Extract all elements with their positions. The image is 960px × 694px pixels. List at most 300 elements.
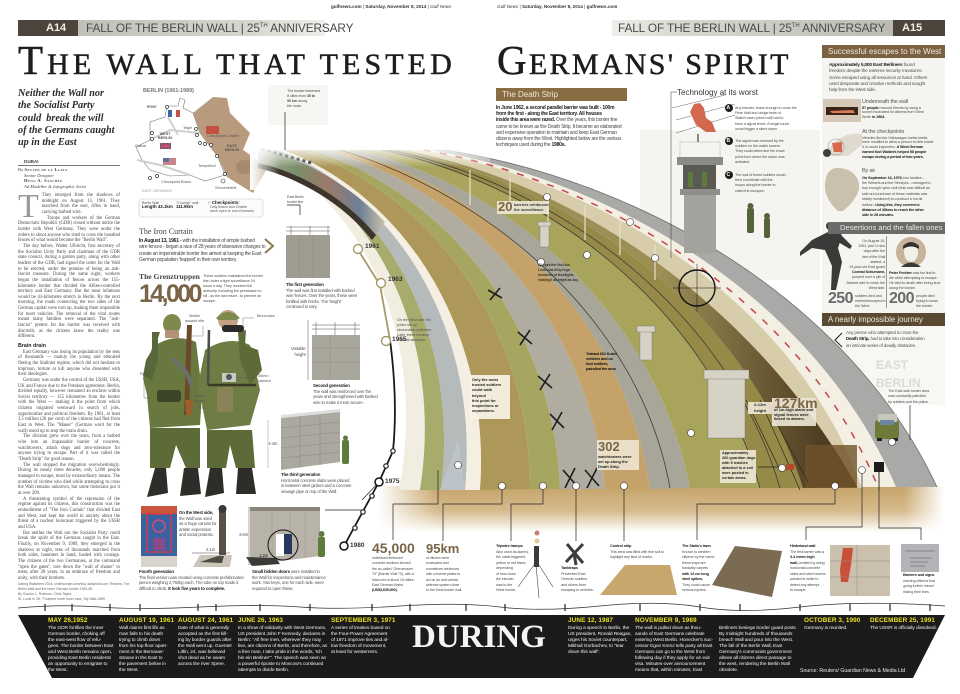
trusted soldiers note: trusted soldiers	[472, 382, 501, 387]
tunnel escape text: Underneath the wall	[862, 99, 908, 105]
top border caption: The border traversed	[287, 88, 320, 93]
timeline entry Nov 1989 continued: The fall of the Berlin Wall, East	[719, 644, 782, 649]
tripwire text: of how close	[496, 570, 516, 576]
tripwire text: West border.	[496, 587, 516, 592]
hidden door text: work. Two keys, one for each side, were	[252, 580, 324, 585]
checkpoint escape text: Vehicles like the Volkswagen Isetta beetle,	[862, 134, 928, 140]
timeline entry Aug 19 1961	[119, 617, 174, 674]
sources note: Daring Wallstreet 2014; smithsonian.com/wsj, dailymail.com; Reuters; The	[18, 582, 129, 586]
dogs callout: attached to a soil	[722, 466, 753, 470]
drop cap: T	[18, 188, 39, 225]
timeline entry Nov 1989	[635, 617, 713, 674]
timeline entry Aug 24 1961: AUGUST 24, 1961	[178, 617, 233, 624]
45,000 text: (US$3,635,000).	[372, 588, 397, 592]
dogs callout: with 5 leashes	[722, 461, 748, 465]
Schumann text: days after the	[864, 248, 885, 253]
200 figure: 200	[889, 290, 914, 307]
header bar right	[612, 20, 945, 36]
timeline entry 1987	[568, 617, 632, 656]
Stalin's lawn text: Known to western	[682, 548, 710, 554]
soldier label leader lines	[144, 318, 256, 408]
200 text: trying to cross	[916, 298, 938, 303]
timeline entry 1987: down this wall".	[568, 650, 600, 655]
timeline entry 1991	[870, 617, 937, 632]
hidden door text: required to open these.	[252, 586, 293, 590]
map labels: WEST	[160, 132, 171, 136]
timeline entry 1971: A series of treaties based on	[331, 626, 390, 631]
hinterland wall text: painted in white to	[790, 576, 818, 581]
watchtower count callout: Death Strip.	[598, 464, 620, 469]
timeline entry Aug 24 1961: accepted as the first kill-	[178, 632, 228, 637]
article column: Troops and workers of the German Democratic Republic (GDR) closed without notice the border with West Germany. They were under the orders to shoot anyone who tried to cross the installed fences of what would become the "Berlin Wall".	[18, 216, 120, 243]
hidden door text	[252, 569, 326, 591]
article column: A threatening symbol of the repression of the regime against its citizens, this construction was the embodiment of "The Iron Curtain" that divided East and West, and kept the world in anxiety about the threat of a nuclear holocaust triggered by the USSR and USA.	[18, 497, 120, 530]
tripwire text: Also used as alarms,	[496, 548, 529, 554]
tripwire device	[518, 530, 553, 598]
timeline entry 1971: SEPTEMBER 3, 1971	[331, 617, 396, 624]
Stalin's lawn text	[682, 543, 715, 592]
Trabant note: vehicles and on	[586, 356, 613, 361]
sources note: St. Louis in '2ft, 'Footprint north' Inner race, 'My Wall-1989'	[18, 597, 105, 601]
timeline entry Nov 1989 continued: Berliners besiege border guard posts.	[719, 626, 797, 631]
map labels: Schoenefeld	[215, 186, 236, 190]
article column: Germany was under the control of the USSR, USA, UK and France due to the Potsdam agreement. Berlin, divided equally, however remained an enclave within Soviet territory — 155 kilometres from the border with the West — making it the point from which citizens migrated westward in search of jobs, opportunities and political freedom. By 1961, at least 3.5 million (20 per cent) of the citizens had fled from East to West. The "Mauer" (German word for the wall) stood up to stop the brain drain.	[18, 378, 120, 434]
timeline years: 1980	[350, 542, 364, 549]
95km text: excavated and	[426, 561, 449, 565]
death strip text: citizens away from the West. Highlighted below are the various	[496, 136, 621, 142]
timeline entry 1952: and West Berlin remains open,	[48, 650, 112, 655]
tank traps on grey band	[488, 288, 599, 488]
variable height label: height	[294, 352, 306, 356]
fourth generation side note: as a huge canvas for	[179, 521, 217, 526]
timeline entry Aug 19 1961: man falls to his death	[119, 632, 163, 637]
map labels: EAST	[227, 144, 237, 148]
warning sign post	[874, 462, 884, 490]
divider	[885, 236, 888, 308]
escapes intro: help from the West side.	[829, 88, 876, 93]
timeline entry 1963	[238, 617, 327, 674]
tripwire text: the cable triggered	[496, 554, 525, 559]
watchtower count callout: 302	[598, 439, 620, 454]
timeline entry Aug 24 1961: ing by border guards after	[178, 638, 231, 643]
iron curtain text: create an impenetrable border line aimed at keeping the East	[139, 251, 261, 257]
Schumann text: started, a	[870, 259, 885, 264]
title right: GERMANS' SPIRIT	[497, 37, 791, 83]
barriers and signs text: risking their lives.	[903, 588, 930, 594]
45,000 text	[372, 556, 414, 592]
checkpoint escape text	[862, 129, 933, 160]
second generation text: years and strengthened with barbed	[313, 394, 378, 399]
45,000 text: 75" (Border Wall 75), with a	[372, 572, 414, 576]
checkpoint escape text: were modified to allow a person to hide inside	[862, 139, 933, 144]
technology marker letters	[726, 105, 730, 178]
variable height label	[291, 346, 306, 357]
timeline entry 1963: live, are citizens of Berlin, and therefore, as	[238, 644, 327, 649]
200 text: people died	[916, 293, 934, 298]
section label right: FALL OF THE BERLIN WALL | 25TH ANNIVERSARY	[618, 21, 885, 35]
Stalin's lawn text: with 14 cm long	[682, 570, 709, 576]
technology: soldiers with dog	[747, 203, 770, 238]
soldier labels: Ammo	[194, 394, 205, 398]
Schumann text: West side.	[868, 285, 885, 290]
fourth generation side note: On the West side,	[179, 510, 213, 515]
timeline entry 1963: a powerful riposte to Moscow's continued	[238, 662, 323, 667]
journey text: an intricate series of deadly obstacles.	[846, 343, 916, 348]
45,000 text: concrete sections formed	[372, 561, 411, 565]
45,000 text: the so-called "Grenzmauer	[372, 567, 413, 571]
tank traps text: Tanktraps	[561, 565, 578, 570]
map labels: Tempelhof	[198, 164, 216, 168]
third generation text: sewage pipe on top of the Wall.	[281, 488, 337, 494]
journey text: Death Strip, had to take into consideration	[846, 336, 924, 341]
trusted soldiers note: inspections or	[472, 403, 499, 408]
Schumann text: Conrad Schumann,	[852, 269, 885, 274]
timeline entry Aug 24 1961: Litfin, 24, was believed	[178, 650, 225, 655]
floodlights note	[538, 262, 579, 282]
soldier labels: pouch	[194, 399, 204, 403]
floodlights note: Lund was lit by huge	[538, 267, 570, 272]
page number A15: A15	[902, 22, 922, 34]
fourth generation side note: artistic expression	[179, 526, 211, 532]
hinterland wall text: detect any attempt	[790, 582, 819, 586]
second generation text	[313, 383, 378, 404]
timeline entry Nov 1989 continued: breach Wall and pour into the West.	[719, 638, 793, 643]
fourth generation text: The final version was created using concrete prefabricated	[139, 574, 243, 580]
technology step B: activated.	[735, 159, 750, 164]
deserter soldier	[800, 222, 852, 290]
hinterland wall swatch	[830, 545, 890, 596]
article column: But neither the Wall nor the Socialist Party could break the spirit of the Germans caught in the East. Finally, on November 9, 1989, they emerged in the shadows at night, tens of thousands marched from both sides, hammers in hand, loaded with courage. The citizens of the two Germanies, at the command "open the gates", tore down the "wall of shame" to meet, after 28 years, in an embrace of freedom and unity, with their brothers.	[18, 531, 120, 581]
timeline entry Aug 24 1961	[178, 617, 233, 668]
balloon escape text: buy enough nylon cloth (this was difficult as	[862, 185, 930, 190]
article column	[18, 188, 120, 581]
fourth generation: wall profile	[192, 505, 232, 567]
west side platforms note: police set up	[397, 322, 417, 327]
masthead right: Gulf News | Saturday, November 8, 2014 | gulfnews.com	[497, 4, 617, 9]
Fechter text: die while attempting to escape.	[889, 275, 937, 280]
intro deck: Neither the Wall nor	[18, 88, 104, 99]
journey header: A nearly impossible journey	[828, 315, 923, 324]
20 barriers callout	[497, 201, 549, 214]
technology step A: would trigger a silent alarm.	[735, 126, 778, 131]
iron curtain text	[139, 238, 266, 263]
Grenztruppen text: kill - as the last resort - to prevent an	[203, 293, 261, 298]
Trabant note: patrolled the area.	[586, 366, 616, 371]
East Berlin side note	[888, 388, 929, 404]
technology step B: They could determine the exact	[735, 148, 784, 153]
third generation size label: 3-4m	[268, 441, 277, 446]
timeline entry Nov 1989 continued: allows all citizens direct passage to	[719, 656, 791, 661]
map legend text: ○ Checkpoints:	[208, 200, 240, 205]
technology: hand icon	[672, 95, 735, 133]
death strip text: came to be known as the Death Strip. It became an elaborated	[496, 124, 622, 130]
14,000 figure: 14,000	[139, 280, 200, 308]
dogs callout: certain areas.	[722, 476, 746, 480]
escapes intro: Some escaped using all resources at hand. Others	[829, 76, 927, 81]
timeline entry 1952: gees. The border between East	[48, 644, 113, 649]
checkpoint escape text: escape during a period of two years.	[862, 154, 924, 159]
timeline years	[350, 243, 406, 549]
map legend text: Berlin Wall	[142, 201, 159, 205]
timeline entry Aug 24 1961: shot dead as he swam	[178, 656, 225, 661]
control strip text	[610, 543, 664, 559]
byline: Ad Modeller & Infographic Artist	[24, 184, 86, 188]
height label	[748, 402, 772, 414]
technology step markers	[725, 104, 733, 179]
control strip swatch	[600, 565, 677, 595]
East Berlin watermark	[876, 357, 921, 392]
hinterland structures at strip foot	[440, 440, 465, 490]
soldier labels: camera	[258, 379, 271, 383]
250 text	[855, 293, 885, 308]
timeline entry 1963: a free man, I take pride in the words, 'Ich	[238, 650, 322, 655]
third generation text: Horizontal concrete slabs were placed	[281, 478, 349, 482]
map legend text	[142, 200, 254, 213]
tank traps text: and others from	[561, 582, 586, 586]
byline: DUBAI	[24, 159, 39, 164]
escape: car image	[823, 133, 862, 157]
East Berlin watermark: EAST	[876, 358, 908, 372]
second generation text: wire to make it more secure.	[313, 400, 364, 404]
watchtowers along the strip	[538, 222, 749, 438]
timeline entry 1990: OCTOBER 3, 1990	[804, 617, 860, 624]
barriers and signs text: warning citizens that	[903, 578, 935, 582]
escapes intro: freedom despite the extreme security measures.	[829, 69, 922, 74]
Trabant note: Trabant 601 Kubel	[586, 351, 617, 356]
desertions header	[828, 222, 945, 234]
map legend text: "Country" wall	[176, 201, 198, 205]
Schumann text	[841, 238, 885, 290]
journey header	[822, 313, 945, 326]
127km callout: 127km	[774, 395, 818, 411]
map labels: Tegel	[183, 126, 192, 130]
timeline entry 1952: The GDR fortifies the inner	[48, 626, 103, 631]
masthead left: gulfnews.com | Saturday, November 8, 2014 | Gulf News	[331, 4, 451, 9]
sources note: Berlin Wall and the Inner German border 1961-89	[18, 587, 92, 591]
East Berlin side note: was constantly patrolled	[888, 393, 926, 398]
timeline entry 1963: JUNE 26, 1963	[238, 617, 283, 624]
balloon escape text: sale and purchase of these materials was	[862, 191, 927, 196]
intro deck: of the Germans caught	[18, 125, 115, 136]
third generation text: in between steel girders and a concrete	[281, 483, 351, 488]
95km figure: 95km	[426, 541, 459, 556]
top fade over strip	[250, 145, 490, 190]
trusted soldiers note	[470, 375, 510, 419]
timeline entry Aug 19 1961: the pavement below in	[119, 662, 166, 667]
timeline entry Aug 19 1961: trying to climb down	[119, 638, 160, 643]
Fechter text: along the border.	[889, 285, 915, 290]
first generation text: wire fences. Over the years, these were	[286, 293, 357, 298]
faint background wall pattern	[268, 45, 945, 405]
death strip text: and expensive operation to maintain and keep East German	[496, 130, 617, 136]
fourth generation text: pieces weighing 2,750kg each. The tube on top made it	[139, 580, 238, 585]
soldier labels: 35mm	[258, 374, 269, 378]
timeline entry Nov 1989: Germans can go to the West from	[635, 650, 705, 655]
technology heading: Technology at its worst	[677, 88, 758, 97]
dogs callout	[720, 450, 756, 483]
timeline entry 1963: Berlin: "All free men, wherever they may	[238, 638, 321, 643]
technology step A: force a signal fence. A single touch	[735, 121, 789, 126]
escapes header	[822, 45, 945, 58]
floodlights note: All night the Ma-Nun	[538, 262, 570, 267]
map labels: EAST GERMANY	[142, 189, 172, 193]
map legend text: Length 43.1km	[142, 204, 173, 209]
127km callout	[772, 398, 816, 426]
map labels: Checkpoint Bravo	[161, 180, 191, 184]
technology marker letters: A	[726, 105, 730, 111]
timeline years: 1975	[385, 478, 399, 485]
timeline entry 1990	[804, 617, 860, 632]
timeline entry Aug 19 1961: strasse in the East to	[119, 656, 162, 661]
technology step B: soldiers on the watch towers.	[735, 143, 781, 148]
small hidden door wall	[246, 507, 325, 566]
fourth generation side note: the Wall was used	[179, 516, 212, 520]
DURING heading: DURING	[412, 619, 546, 655]
map labels: Gatzar	[135, 144, 146, 148]
first generation text: The wall was first installed with barbed	[286, 288, 355, 292]
west side platforms note: a tourist attraction.	[397, 337, 426, 342]
timeline entry 1991: DECEMBER 25, 1991	[870, 617, 935, 624]
barbed wire	[18, 603, 945, 611]
watchtower count callout: set up along the	[598, 459, 628, 464]
journey text: Any person who attempted to cross the	[846, 330, 918, 335]
soldier labels: Radio	[140, 372, 150, 376]
timeline band	[18, 615, 945, 678]
tank traps text: German soldiers	[561, 576, 587, 581]
tank trap icon	[566, 544, 583, 565]
floodlights note: hundreds of floodlights,	[538, 272, 574, 277]
intro deck: up in the East	[18, 137, 77, 148]
death strip header	[496, 88, 627, 101]
fourth generation side note	[179, 510, 217, 537]
trusted soldiers note: beyond	[472, 393, 486, 398]
soldier labels: Middle	[189, 314, 200, 318]
top border caption	[287, 88, 320, 108]
technology step B	[735, 138, 785, 164]
Grenztruppen text: hours a day. They received full	[203, 283, 252, 288]
95km text: to the West border wall.	[426, 588, 462, 592]
Stalin's lawn text: serious injuries.	[682, 587, 706, 592]
byline: Hugo A. Sanchez	[24, 178, 62, 183]
technology marker letters: B	[726, 138, 730, 144]
hidden door width label: 1.2m	[259, 553, 268, 558]
timeline entry 1971: of 1971 improve ties and al-	[331, 638, 389, 643]
chevrons	[265, 239, 842, 347]
death strip text: In June 1962, a second parallel barrier was built - 100m	[496, 105, 614, 111]
soldier: front view with binoculars	[198, 310, 262, 497]
tunnel escape text	[862, 99, 924, 120]
timeline entry 1990: Germany is reunited.	[804, 626, 847, 631]
legend box	[139, 199, 263, 217]
journey text	[846, 330, 924, 349]
Stalin's lawn text: They could cause	[682, 582, 710, 586]
desertions header: Desertions and the fallen ones	[840, 223, 943, 232]
escapes intro: Approximately 5,000 East Berliners found	[829, 63, 915, 68]
second generation text: Second generation	[313, 383, 350, 388]
timeline years: 1965	[392, 336, 406, 343]
timeline entry 1987: During a speech in Berlin, the	[568, 626, 629, 631]
third generation text	[281, 472, 352, 494]
timeline entry 1952: an opportunity to emigrate to	[48, 662, 107, 667]
second generation wall	[308, 320, 360, 380]
source line: Source: Reuters/ Guardian News & Media Ltd	[800, 668, 905, 674]
technology step B: point from where the alarm was	[735, 154, 784, 159]
map labels: BERLIN	[225, 148, 239, 152]
map labels	[135, 105, 239, 193]
top border caption: 8 cities from 30 to	[287, 93, 315, 98]
tank traps text	[561, 565, 594, 592]
Grenztruppen text: escape.	[203, 298, 216, 303]
200 text	[916, 293, 938, 308]
third generation wall	[268, 409, 349, 470]
200 text: the border.	[916, 303, 933, 308]
Fechter text: He bled to death after being shot	[889, 280, 940, 285]
Schumann text: 19-year-old East guard	[849, 264, 885, 269]
header bar left	[18, 20, 325, 36]
95km text: act as an anti-vehicle	[426, 578, 458, 582]
balloon escape text	[862, 168, 930, 218]
Schumann text: On August 15,	[862, 238, 885, 243]
barriers and signs text: Barriers and signs	[903, 572, 934, 577]
timeline of wall generations	[340, 244, 395, 550]
page number A14: A14	[46, 22, 66, 34]
Trabant note: foot soldiers,	[586, 361, 608, 366]
death strip bands	[255, 150, 937, 490]
127km callout: linked to alarms.	[774, 416, 805, 421]
Trabant note	[586, 351, 617, 371]
iron curtain text: In August 13, 1961 - with the installation of simple barbed	[139, 238, 255, 244]
dogs callout: were posted in	[722, 471, 749, 475]
timeline entry Nov 1989: means that, within minutes, East	[635, 668, 702, 673]
Stalin's lawn text: citizens by the name,	[682, 554, 715, 559]
first generation text	[286, 282, 358, 309]
map labels: Brian	[147, 105, 156, 109]
technology: watchtower	[671, 92, 723, 258]
warning sign swatch	[901, 544, 939, 572]
Grenztruppen text	[203, 273, 263, 303]
barbed wire fence posts along strip	[470, 170, 655, 280]
balloon escape text: distance of 40kms to reach the other	[862, 207, 924, 212]
95km text	[426, 556, 462, 592]
hinterland wall text: Hinterland wall	[790, 543, 815, 548]
sources note	[18, 582, 130, 601]
timeline entry Nov 1989 continued: the west, rendering the Berlin Wall	[719, 662, 790, 667]
border line caption: East Berlin	[287, 195, 304, 199]
timeline entry Nov 1989: cessor Egon Krenz tells party all East	[635, 644, 712, 649]
checkpoint escape text: named Karl Walderk helped 58 people	[862, 149, 926, 154]
hinterland wall text: horizontal concrete	[790, 565, 820, 570]
second generation text: The wall was reinforced over the	[313, 388, 371, 394]
timeline entry 1971	[331, 617, 396, 656]
250 figure: 250	[828, 290, 853, 307]
barriers and signs text	[903, 572, 935, 594]
timeline entry Aug 19 1961: AUGUST 19, 1961	[119, 617, 174, 624]
timeline entry 1952: providing East Berlin residents	[48, 656, 111, 661]
20 barriers callout: 20	[498, 199, 512, 214]
250 text: soldiers died and	[855, 293, 882, 298]
intro deck: could break the will	[18, 113, 103, 124]
timeline entry Nov 1989 continued	[719, 617, 797, 674]
timeline entry Aug 24 1961: Date of what is generally	[178, 626, 229, 631]
Grenztruppen text: authority, including the permission to	[203, 288, 261, 293]
timeline entry 1987: urges his Soviet counterpart,	[568, 638, 627, 643]
Stalin's lawn text: basically carpets	[682, 565, 708, 570]
Stalin's lawn text: these traps are	[682, 560, 706, 564]
45,000 text: total cost of about 16 million	[372, 578, 414, 582]
Peter Fechter portrait	[896, 237, 926, 267]
soldiers	[143, 310, 262, 497]
death strip text: from the first - along the East territory. All houses	[496, 111, 602, 117]
